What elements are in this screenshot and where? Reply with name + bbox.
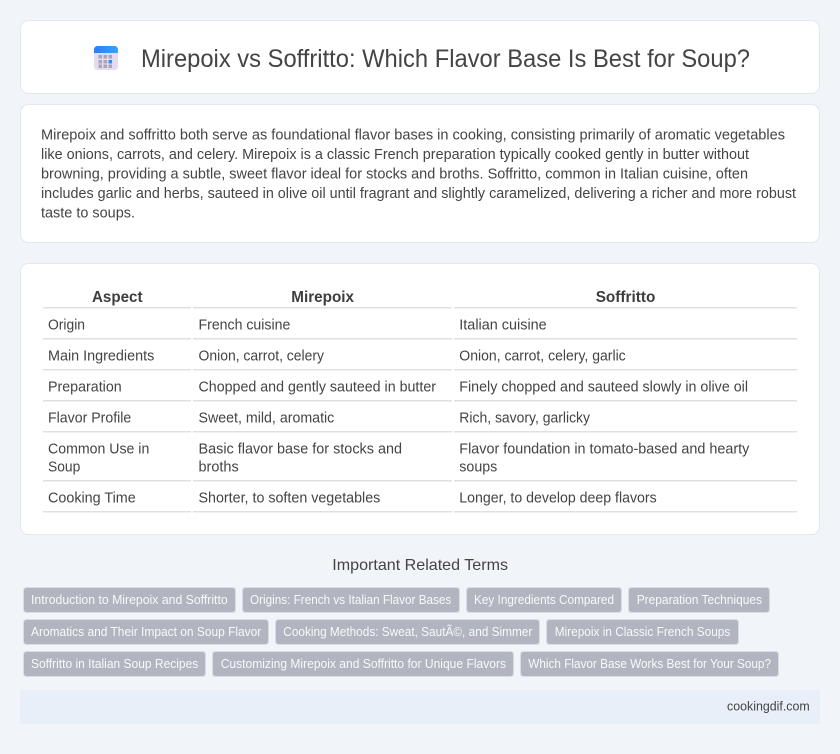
table row: common use in soup: Flavor foundation in tomato-based and hearty xyxy=(459,441,750,457)
title: Mirepoix vs Soffritto: Which Flavor Base Is Best for Soup? xyxy=(141,45,750,73)
table row: main ingredients: Main Ingredients xyxy=(48,348,154,364)
tag: Which Flavor Base Works Best for Your Soup? xyxy=(528,656,771,671)
table row: flavor profile: Rich, savory, garlicky xyxy=(459,410,591,426)
tag xyxy=(276,620,540,644)
table row: flavor profile: Flavor Profile xyxy=(48,410,131,426)
footer band xyxy=(20,690,820,724)
text block: introduction paragraph: includes garlic and herbs, sauteed in olive oil until fragrant and slightly caramelized, delivering a richer and more robust xyxy=(41,185,797,202)
table header row: Soffritto xyxy=(596,289,655,306)
tag: Key Ingredients Compared xyxy=(474,592,614,607)
table row: preparation xyxy=(43,379,797,402)
tag xyxy=(24,620,268,644)
panel: related term tags xyxy=(24,588,778,676)
table row: cooking time xyxy=(43,490,797,512)
icon: calendar xyxy=(94,46,118,70)
tag xyxy=(242,588,460,612)
table row: common use in soup: soups xyxy=(459,459,497,475)
tag: Cooking Methods: Sweat, SautÃ©, and Simmer xyxy=(283,624,533,639)
table row: cooking time: Cooking Time xyxy=(48,490,136,506)
tag: Origins: French vs Italian Flavor Bases xyxy=(250,592,452,607)
footer source text: cookingdif.com xyxy=(727,700,810,714)
table row: origin xyxy=(43,317,797,340)
table row: preparation: Finely chopped and sauteed slowly in olive oil xyxy=(459,379,748,395)
table row: main ingredients xyxy=(43,348,797,370)
table header row: Aspect xyxy=(92,289,142,306)
table header row: Mirepoix xyxy=(291,289,354,306)
text block: introduction paragraph: Mirepoix and soffritto both serve as foundational flavor bases in cooking, consisting primarily of aromatic vegetables xyxy=(41,126,785,143)
panel: introduction xyxy=(20,104,820,242)
table row: common use in soup: Common Use in xyxy=(48,441,149,457)
tag xyxy=(24,652,206,676)
table row: cooking time: Shorter, to soften vegetables xyxy=(198,490,380,506)
tag: Introduction to Mirepoix and Soffritto xyxy=(31,592,228,607)
table row: origin: Italian cuisine xyxy=(459,317,547,333)
text block: introduction paragraph: taste to soups. xyxy=(41,204,135,221)
table row: main ingredients: Onion, carrot, celery, garlic xyxy=(459,348,626,364)
tag: Customizing Mirepoix and Soffritto for Unique Flavors xyxy=(221,656,506,671)
tag xyxy=(546,620,738,644)
tag xyxy=(24,588,236,612)
table row: cooking time: Longer, to develop deep flavors xyxy=(459,490,657,506)
tag: Aromatics and Their Impact on Soup Flavor xyxy=(31,624,262,639)
tag: Mirepoix in Classic French Soups xyxy=(555,624,731,639)
text block: introduction paragraph: like onions, carrots, and celery. Mirepoix is a classic French preparation typically cooked gently in butter without xyxy=(41,146,750,163)
table row: common use in soup: broths xyxy=(198,459,239,475)
table row: origin: French cuisine xyxy=(198,317,290,333)
table row: origin: Origin xyxy=(48,317,85,333)
heading: important related terms: Important Related Terms xyxy=(332,557,508,574)
tag xyxy=(520,652,778,676)
table header row xyxy=(43,289,797,308)
tag xyxy=(466,588,622,612)
tag: Soffritto in Italian Soup Recipes xyxy=(31,656,199,671)
tag xyxy=(628,588,770,612)
table row: common use in soup: Soup xyxy=(48,459,80,475)
table row: common use in soup xyxy=(43,441,797,482)
table row: preparation: Chopped and gently sauteed in butter xyxy=(198,379,436,395)
table row: flavor profile: Sweet, mild, aromatic xyxy=(198,410,334,426)
table row: common use in soup: Basic flavor base for stocks and xyxy=(198,441,402,457)
table row: flavor profile xyxy=(43,410,797,432)
panel: comparison table xyxy=(20,264,820,534)
panel: header xyxy=(20,20,820,94)
tag: Preparation Techniques xyxy=(637,592,762,607)
table row: preparation: Preparation xyxy=(48,379,122,395)
text block: introduction paragraph xyxy=(41,126,797,221)
table row: main ingredients: Onion, carrot, celery xyxy=(198,348,325,364)
tag xyxy=(212,652,514,676)
text block: introduction paragraph: browning, providing a subtle, sweet flavor ideal for stocks and broths. Soffritto, common in Italian cuisine, often xyxy=(41,165,748,182)
